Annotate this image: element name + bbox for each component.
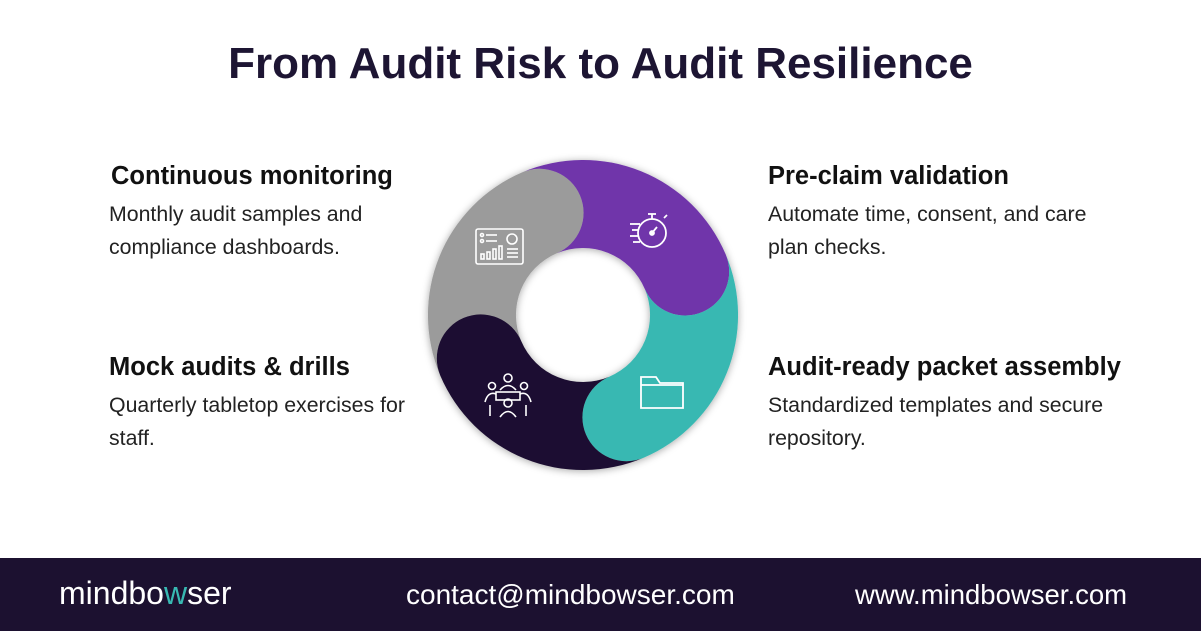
text block: pre-claim validation [768, 162, 1086, 259]
text block: packet assembly: Audit-ready packet assembly [768, 353, 1121, 381]
footer bar [0, 558, 1201, 631]
text block: pre-claim validation: Automate time, consent, and care plan checks. [768, 202, 1086, 259]
website: www.mindbowser.com [855, 579, 1127, 610]
text block: packet assembly [768, 353, 1121, 450]
icon: dashboard [476, 229, 523, 264]
text block: mock audits: Quarterly tabletop exercises for staff. [109, 393, 405, 450]
logo: mindbowser [59, 575, 232, 611]
text block: packet assembly: Standardized templates and secure repository. [768, 393, 1103, 450]
title: From Audit Risk to Audit Resilience [228, 39, 973, 88]
text block: mock audits [109, 353, 405, 450]
text block: continuous monitoring [109, 162, 393, 259]
icon: meeting people [485, 374, 531, 417]
contact email: contact@mindbowser.com [406, 579, 735, 610]
text block: continuous monitoring: Monthly audit samples and compliance dashboards. [109, 202, 362, 259]
text block: pre-claim validation: Pre-claim validation [768, 162, 1009, 190]
text block: continuous monitoring: Continuous monitoring [111, 162, 393, 190]
icon: stopwatch [630, 214, 667, 247]
text block: mock audits: Mock audits & drills [109, 353, 350, 381]
icon: folder [641, 377, 683, 408]
